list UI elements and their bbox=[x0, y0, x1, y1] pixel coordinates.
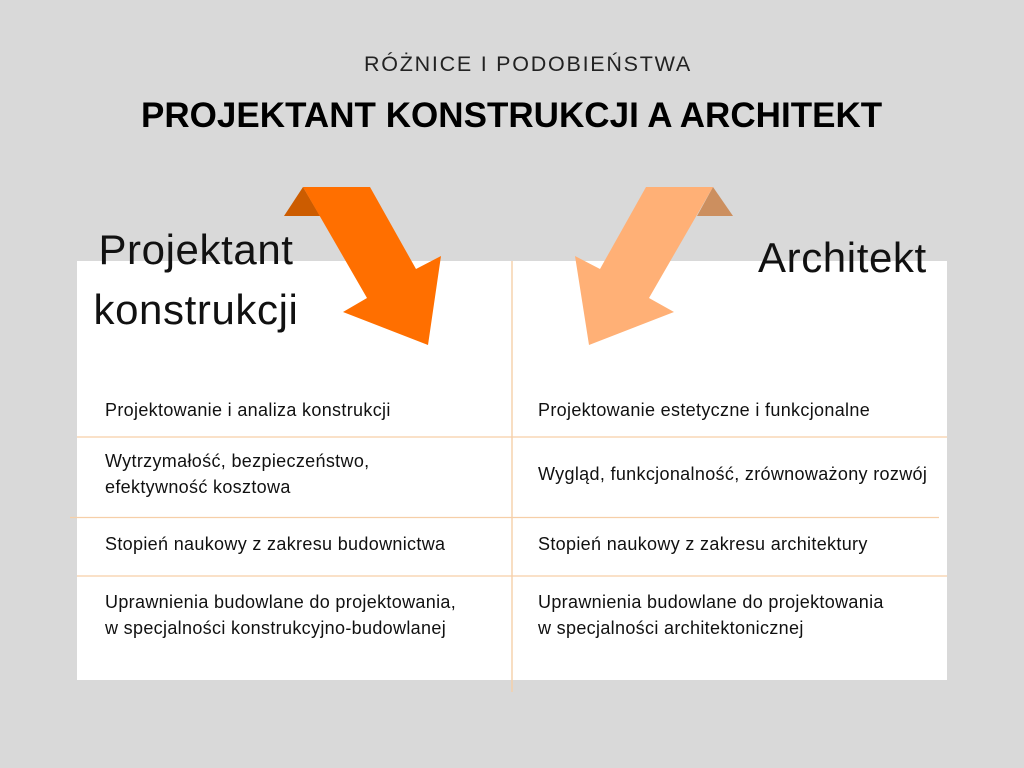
row 1 right: Projektowanie estetyczne i funkcjonalne bbox=[538, 400, 870, 420]
row 2 left bbox=[105, 451, 370, 497]
heading: Projektant konstrukcji: Projektant bbox=[98, 226, 294, 273]
row 4 left: w specjalności konstrukcyjno-budowlanej bbox=[105, 618, 446, 638]
row 4 right: Uprawnienia budowlane do projektowania bbox=[538, 592, 884, 612]
row 2 right: Wygląd, funkcjonalność, zrównoważony rozwój bbox=[538, 464, 927, 484]
row 4 right: w specjalności architektonicznej bbox=[538, 618, 804, 638]
heading: Architekt: Architekt bbox=[758, 234, 927, 281]
row 4 left: Uprawnienia budowlane do projektowania, bbox=[105, 592, 456, 612]
row 3 left: Stopień naukowy z zakresu budownictwa bbox=[105, 534, 445, 554]
row 2 left: efektywność kosztowa bbox=[105, 477, 291, 497]
row 4 left bbox=[105, 592, 456, 638]
heading: Projektant konstrukcji bbox=[94, 226, 298, 333]
title: PROJEKTANT KONSTRUKCJI A ARCHITEKT bbox=[141, 96, 882, 135]
heading: Projektant konstrukcji: konstrukcji bbox=[94, 286, 298, 333]
row 4 right bbox=[538, 592, 884, 638]
row 3 right: Stopień naukowy z zakresu architektury bbox=[538, 534, 868, 554]
row 1 left: Projektowanie i analiza konstrukcji bbox=[105, 400, 391, 420]
subtitle: RÓŻNICE I PODOBIEŃSTWA bbox=[364, 52, 692, 76]
row 2 left: Wytrzymałość, bezpieczeństwo, bbox=[105, 451, 370, 471]
panel: comparison table bbox=[77, 261, 947, 680]
